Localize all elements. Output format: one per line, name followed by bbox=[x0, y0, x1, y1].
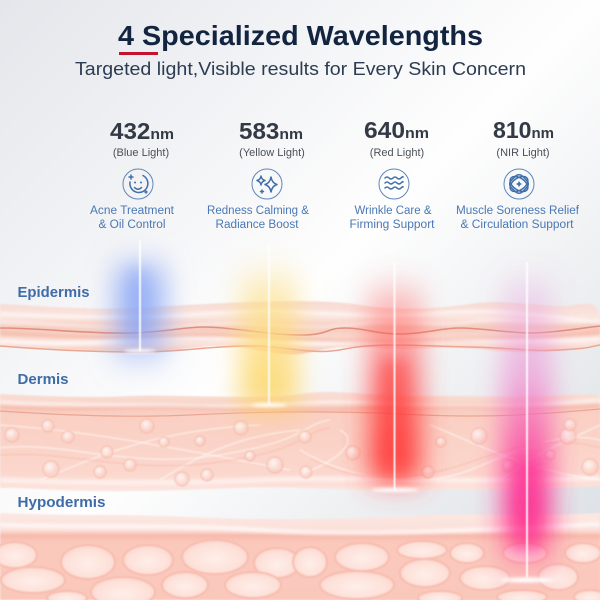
benefit: circulation: & Circulation Support bbox=[460, 219, 574, 231]
blue light caption: (Blue Light) bbox=[113, 147, 169, 159]
label: dermis: Dermis bbox=[18, 371, 68, 388]
subtitle: Targeted light,Visible results for Every Skin Concern bbox=[75, 59, 526, 79]
column: 432nm blue bbox=[90, 118, 175, 231]
wavelength 583nm: 583nm bbox=[239, 118, 303, 144]
label: hypodermis: Hypodermis bbox=[18, 494, 106, 511]
benefit: firming: Firming Support bbox=[350, 219, 435, 231]
layer: hypodermis upper band bbox=[0, 513, 600, 600]
layer: dermis tissue bbox=[0, 392, 600, 491]
icon: waves bbox=[379, 169, 409, 199]
icon: sparkles bbox=[252, 169, 282, 199]
column: 810nm NIR bbox=[456, 117, 580, 231]
wavelength 810nm: 810nm bbox=[493, 117, 554, 143]
wavelength 640nm: 640nm bbox=[364, 117, 429, 143]
title: 4 Specialized Wavelengths bbox=[118, 20, 483, 51]
column: 583nm yellow bbox=[207, 118, 309, 231]
benefit: redness: Redness Calming & bbox=[207, 205, 309, 217]
beam: NIR light bbox=[501, 262, 553, 582]
title underline bbox=[119, 52, 158, 55]
beam: yellow light bbox=[240, 245, 298, 420]
benefit: oil control: & Oil Control bbox=[98, 219, 166, 231]
column: 640nm red bbox=[350, 117, 435, 231]
beam: red light bbox=[368, 262, 422, 492]
icon: orbit bbox=[504, 169, 534, 199]
fat cells bbox=[0, 540, 600, 600]
layer: epidermis skin band bbox=[0, 301, 600, 354]
benefit: radiance: Radiance Boost bbox=[216, 219, 299, 231]
NIR light caption: (NIR Light) bbox=[496, 147, 550, 159]
yellow light caption: (Yellow Light) bbox=[239, 147, 305, 159]
wavelength 432nm: 432nm bbox=[110, 118, 174, 144]
benefit: acne: Acne Treatment bbox=[90, 205, 175, 217]
collagen fibers bbox=[0, 420, 600, 480]
collagen bubbles bbox=[5, 419, 598, 486]
benefit: wrinkle: Wrinkle Care & bbox=[354, 205, 432, 217]
beam: blue light bbox=[114, 240, 166, 375]
red light caption: (Red Light) bbox=[370, 147, 424, 159]
benefit: muscle: Muscle Soreness Relief bbox=[456, 205, 580, 217]
label: epidermis: Epidermis bbox=[18, 284, 90, 301]
icon: smiling face bbox=[123, 169, 153, 199]
